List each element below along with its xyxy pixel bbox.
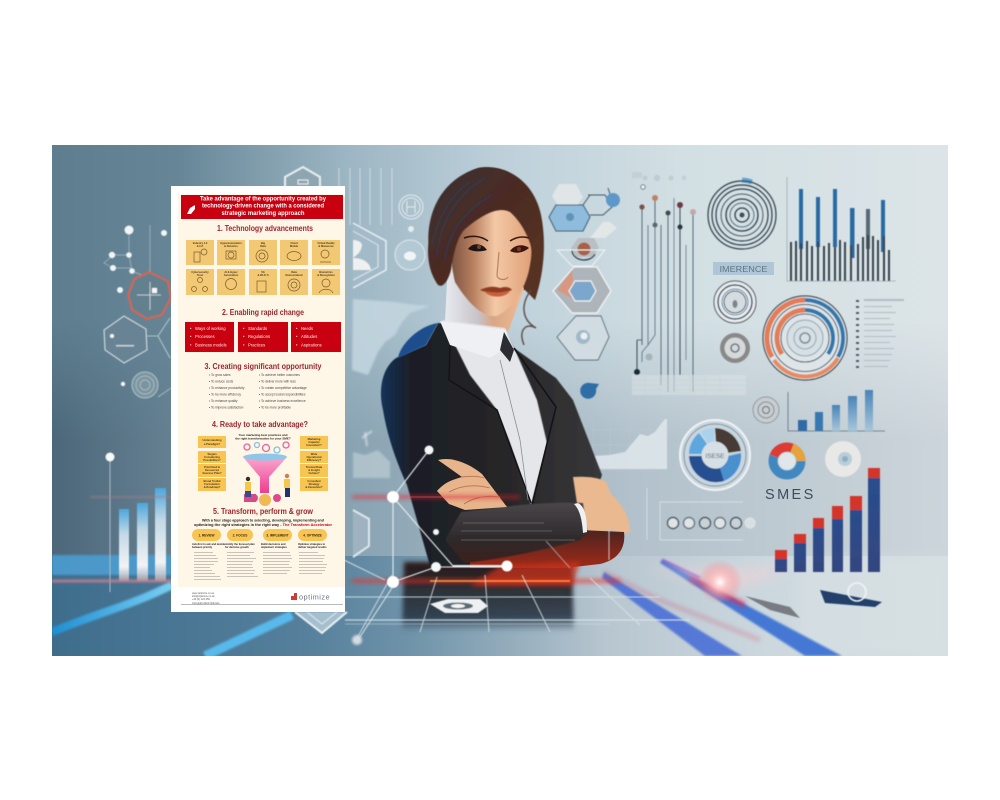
red change boxes: Standards	[248, 326, 267, 331]
rising red and blue bars	[775, 468, 880, 572]
right option boxes: Culture?	[308, 471, 320, 475]
left option boxes	[198, 436, 226, 491]
stage detail text: Ask-first to ask and decide	[192, 542, 226, 546]
blue light stroke under poster	[205, 615, 292, 656]
donut chart	[680, 420, 750, 490]
node dots	[109, 226, 167, 386]
vertical data lines	[632, 172, 746, 395]
icon: person hexagon	[353, 223, 386, 288]
right option boxes: Efficiency?	[307, 458, 322, 462]
technology tiles: Virtual Reality	[317, 241, 335, 245]
technology tiles: Cybersecurity	[191, 270, 209, 274]
right option boxes: Trusted Data	[306, 465, 323, 469]
technology tiles: Cloud	[290, 241, 298, 245]
opportunity lists	[209, 373, 307, 410]
ring gauge	[714, 281, 756, 323]
donut chart: ISESE	[705, 453, 725, 460]
poster banner: technology-driven change with a considered	[202, 204, 324, 210]
hair highlights	[432, 178, 492, 260]
floor grid lines	[344, 560, 690, 640]
technology tiles: Biometrics	[319, 270, 333, 274]
lips	[480, 287, 512, 297]
left option boxes: a Paradigm?	[204, 442, 220, 446]
left option boxes: Broad Toolkit	[203, 479, 221, 483]
poster banner: Take advantage of the opportunity created by	[200, 196, 327, 202]
left option boxes: Considering	[204, 455, 220, 459]
technology tiles: Trust	[197, 273, 203, 277]
left option boxes: Prioritized &	[204, 465, 220, 469]
concentric circle chart	[708, 180, 776, 249]
four stage pills: 4. OPTIMIZE	[303, 534, 322, 538]
grey disc	[720, 333, 750, 363]
technology tiles: & Metaverse	[318, 244, 334, 248]
photo scene	[52, 145, 948, 656]
opportunity lists: • To enhance productivity	[209, 386, 245, 390]
floor emblem	[430, 599, 488, 613]
transform intro text: optimizing the right strategies in the right way - The Transform Accelerator	[194, 523, 333, 527]
icon sequence panel	[647, 488, 755, 540]
bar chart top right	[787, 177, 896, 281]
right option boxes: Consulted	[307, 479, 321, 483]
icon: target circle	[132, 372, 171, 398]
right option boxes: Marketing	[308, 437, 321, 441]
opportunity lists: • To accept social responsibilities	[259, 392, 306, 396]
icon: copper hexagon	[557, 238, 605, 266]
poster logo: optimize	[299, 594, 330, 602]
red change boxes: Processes	[195, 334, 215, 339]
icon: circle tool	[399, 195, 423, 232]
right option boxes: Capacity	[308, 440, 320, 444]
vertical light lines	[339, 168, 392, 225]
pale area chart	[593, 419, 667, 470]
stage detail text: Jointly the focused plan	[225, 542, 255, 546]
technology tiles: & Recognition	[317, 273, 335, 277]
opportunity lists: • To achieve business excellence	[259, 399, 306, 403]
heading: technology advancements: 1. Technology advancements	[217, 224, 313, 233]
faint red line left	[52, 497, 175, 581]
poster logo	[291, 593, 330, 602]
transform intro text: With a four stage approach to selecting, developing, implementing and	[202, 518, 324, 522]
technology tiles: Data	[291, 270, 297, 274]
red change boxes: Needs	[301, 326, 313, 331]
lower left line chart	[353, 431, 390, 478]
hair sweep	[428, 168, 542, 286]
eyes and brows	[464, 236, 529, 253]
icon: pie	[580, 383, 599, 399]
white ring	[825, 441, 861, 477]
opportunity lists: • To achieve better outcomes	[259, 373, 300, 377]
small blue bar chart	[788, 390, 885, 431]
nose	[497, 252, 508, 279]
red change boxes: •	[296, 326, 298, 331]
icon: outline hexagon	[557, 316, 609, 360]
loose hair strand	[522, 290, 536, 345]
stage detail text	[192, 542, 327, 580]
red-tinted sleeve	[470, 530, 624, 568]
stage detail text: implement strategies	[261, 545, 288, 549]
right option boxes: Wide	[311, 452, 318, 456]
technology tiles: & IoT	[197, 244, 204, 248]
red change boxes: •	[190, 342, 192, 348]
red change boxes: Practices	[248, 342, 265, 348]
small disc	[753, 397, 779, 423]
technology tiles: 5G	[261, 270, 265, 274]
four stage pills: 2. FOCUS	[233, 534, 247, 538]
funnel illustration	[243, 442, 290, 506]
opportunity lists: • To enhance quality	[209, 399, 238, 403]
left option boxes: Resourced	[205, 468, 219, 472]
left hand	[437, 459, 507, 510]
transform intro text	[194, 518, 333, 527]
top hexagon icon	[284, 166, 322, 186]
left option boxes: Understanding	[203, 438, 222, 442]
shirt	[442, 320, 547, 505]
hair back	[428, 167, 544, 300]
left option boxes: Targets	[207, 452, 217, 456]
heading: transform, perform and grow: 5. Transform, perform & grow	[213, 507, 314, 516]
funnel tagline: Your marketing best practices and	[239, 433, 288, 437]
opportunity lists: • To be more efficiency	[209, 392, 241, 396]
woman figure	[381, 167, 630, 632]
poster footer contact	[192, 592, 220, 605]
left network diagram	[104, 225, 171, 398]
left option boxes: & Roadmap?	[204, 485, 221, 489]
left option boxes: Success Plan?	[203, 471, 222, 475]
label: inference: IMERENCE	[720, 265, 768, 274]
jacket body	[381, 323, 602, 566]
poster footer contact: www.optimize.co.uk	[192, 592, 215, 595]
right option boxes: Strategy	[309, 482, 320, 486]
collar	[440, 321, 510, 358]
poster footer contact: +44 (0) 123 456	[192, 598, 210, 601]
shirt cuff	[574, 503, 587, 533]
icon: small hexagon outline	[353, 510, 369, 557]
right option boxes: Operational	[307, 455, 322, 459]
stage detail text: between priority	[192, 545, 213, 549]
left bar chart	[106, 452, 166, 592]
stage detail text: Build decisions and	[261, 542, 286, 546]
red change boxes: Attitudes	[301, 334, 317, 339]
orange and blue ring chart	[763, 296, 847, 380]
funnel tagline	[235, 433, 291, 440]
right hexagon cluster	[549, 184, 620, 399]
icon: red hexagon	[128, 272, 171, 319]
infographic scene	[52, 145, 948, 656]
heading: creating significant opportunity: 3. Creating significant opportunity	[204, 362, 322, 371]
four stage pills	[192, 529, 327, 541]
opportunity lists: • To reduce costs	[209, 380, 234, 384]
table light bands	[602, 560, 882, 656]
opportunity lists: • To be more profitable	[259, 406, 291, 410]
legend list	[856, 299, 904, 368]
icon: grey hexagon	[553, 267, 611, 313]
red change boxes: Regulations	[248, 334, 270, 339]
stage detail text: deliver targeted results	[298, 545, 327, 549]
technology tiles: & Wi-Fi 6	[257, 273, 269, 277]
forearm sleeve	[445, 503, 587, 563]
right option boxes: & Execution?	[305, 485, 323, 489]
four stage pills: 1. REVIEW	[198, 534, 215, 538]
sleeve stitching	[461, 523, 575, 540]
icon: white hexagon	[104, 316, 170, 363]
red light streaks	[352, 497, 620, 586]
red change boxes: •	[243, 326, 245, 331]
poster footer contact: Copyright 2024 Optimize	[192, 602, 220, 605]
technology tiles: Big	[261, 241, 266, 245]
opportunity lists: • To deliver more with less	[259, 380, 296, 384]
right option boxes: & Insight	[308, 468, 320, 472]
red change boxes: Ways of working	[195, 326, 226, 331]
poster footer contact: info@optimize.co.uk	[192, 595, 215, 598]
icon: cloud circle	[395, 240, 425, 270]
funnel tagline: the right transformation for your SME?	[235, 436, 291, 440]
red change boxes: •	[243, 342, 245, 348]
red change boxes: •	[296, 342, 298, 348]
blue light stroke left	[52, 585, 172, 632]
poster banner: strategic marketing approach	[222, 211, 305, 217]
stage detail text: for decisive growth	[225, 545, 249, 549]
opportunity lists: • To create competitive advantage	[259, 386, 307, 390]
technology tiles: Industry 4.0	[193, 241, 208, 245]
red change boxes	[185, 322, 341, 352]
technology tiles: Automation	[224, 273, 239, 277]
poster footer rule	[181, 604, 343, 606]
red change boxes: •	[190, 326, 192, 331]
technology tiles: Data	[260, 244, 266, 248]
left option boxes: Possibilities?	[203, 458, 221, 462]
opportunity lists: • To grow sales	[209, 373, 231, 377]
right option boxes	[300, 436, 328, 491]
background wall	[52, 145, 948, 560]
table surface	[52, 555, 948, 656]
poster	[171, 186, 345, 612]
red change boxes: Business models	[195, 342, 227, 348]
red change boxes: •	[243, 334, 245, 339]
red change boxes: •	[190, 334, 192, 339]
heading: ready to take advantage: 4. Ready to take advantage?	[212, 420, 308, 429]
technology tiles	[186, 240, 340, 295]
icon: bottom hexagon	[295, 612, 347, 633]
heading: enabling rapid change: 2. Enabling rapid change	[222, 308, 304, 317]
label: SMES: SMES	[765, 487, 816, 503]
poster banner	[181, 195, 343, 219]
left option boxes: Formulation	[204, 482, 220, 486]
colour ring	[773, 447, 801, 475]
tie shadow	[500, 332, 514, 362]
neck	[445, 262, 524, 332]
face	[451, 208, 531, 316]
red change boxes: •	[296, 334, 298, 339]
world map	[352, 299, 430, 375]
opportunity lists: • To improve satisfaction	[209, 406, 244, 410]
technology tiles: Mobile	[290, 244, 299, 248]
technology tiles: Al & Hyper	[224, 270, 238, 274]
right option boxes: Innovation?	[306, 443, 322, 447]
technology tiles: Hyperautomation	[220, 241, 242, 245]
lapels	[449, 345, 556, 505]
red change boxes: Aspirations	[301, 342, 322, 348]
technology tiles: Democratized	[285, 273, 303, 277]
technology tiles: & Robotics	[224, 244, 238, 248]
network lines over figure	[352, 446, 609, 645]
blue shoulder rim	[398, 323, 438, 358]
four stage pills: 3. IMPLEMENT	[266, 534, 289, 538]
right hand	[573, 477, 630, 533]
jacket reflection on table	[402, 562, 574, 632]
stage detail text: Optimize strategies to	[298, 542, 326, 546]
label: inference	[713, 262, 774, 275]
